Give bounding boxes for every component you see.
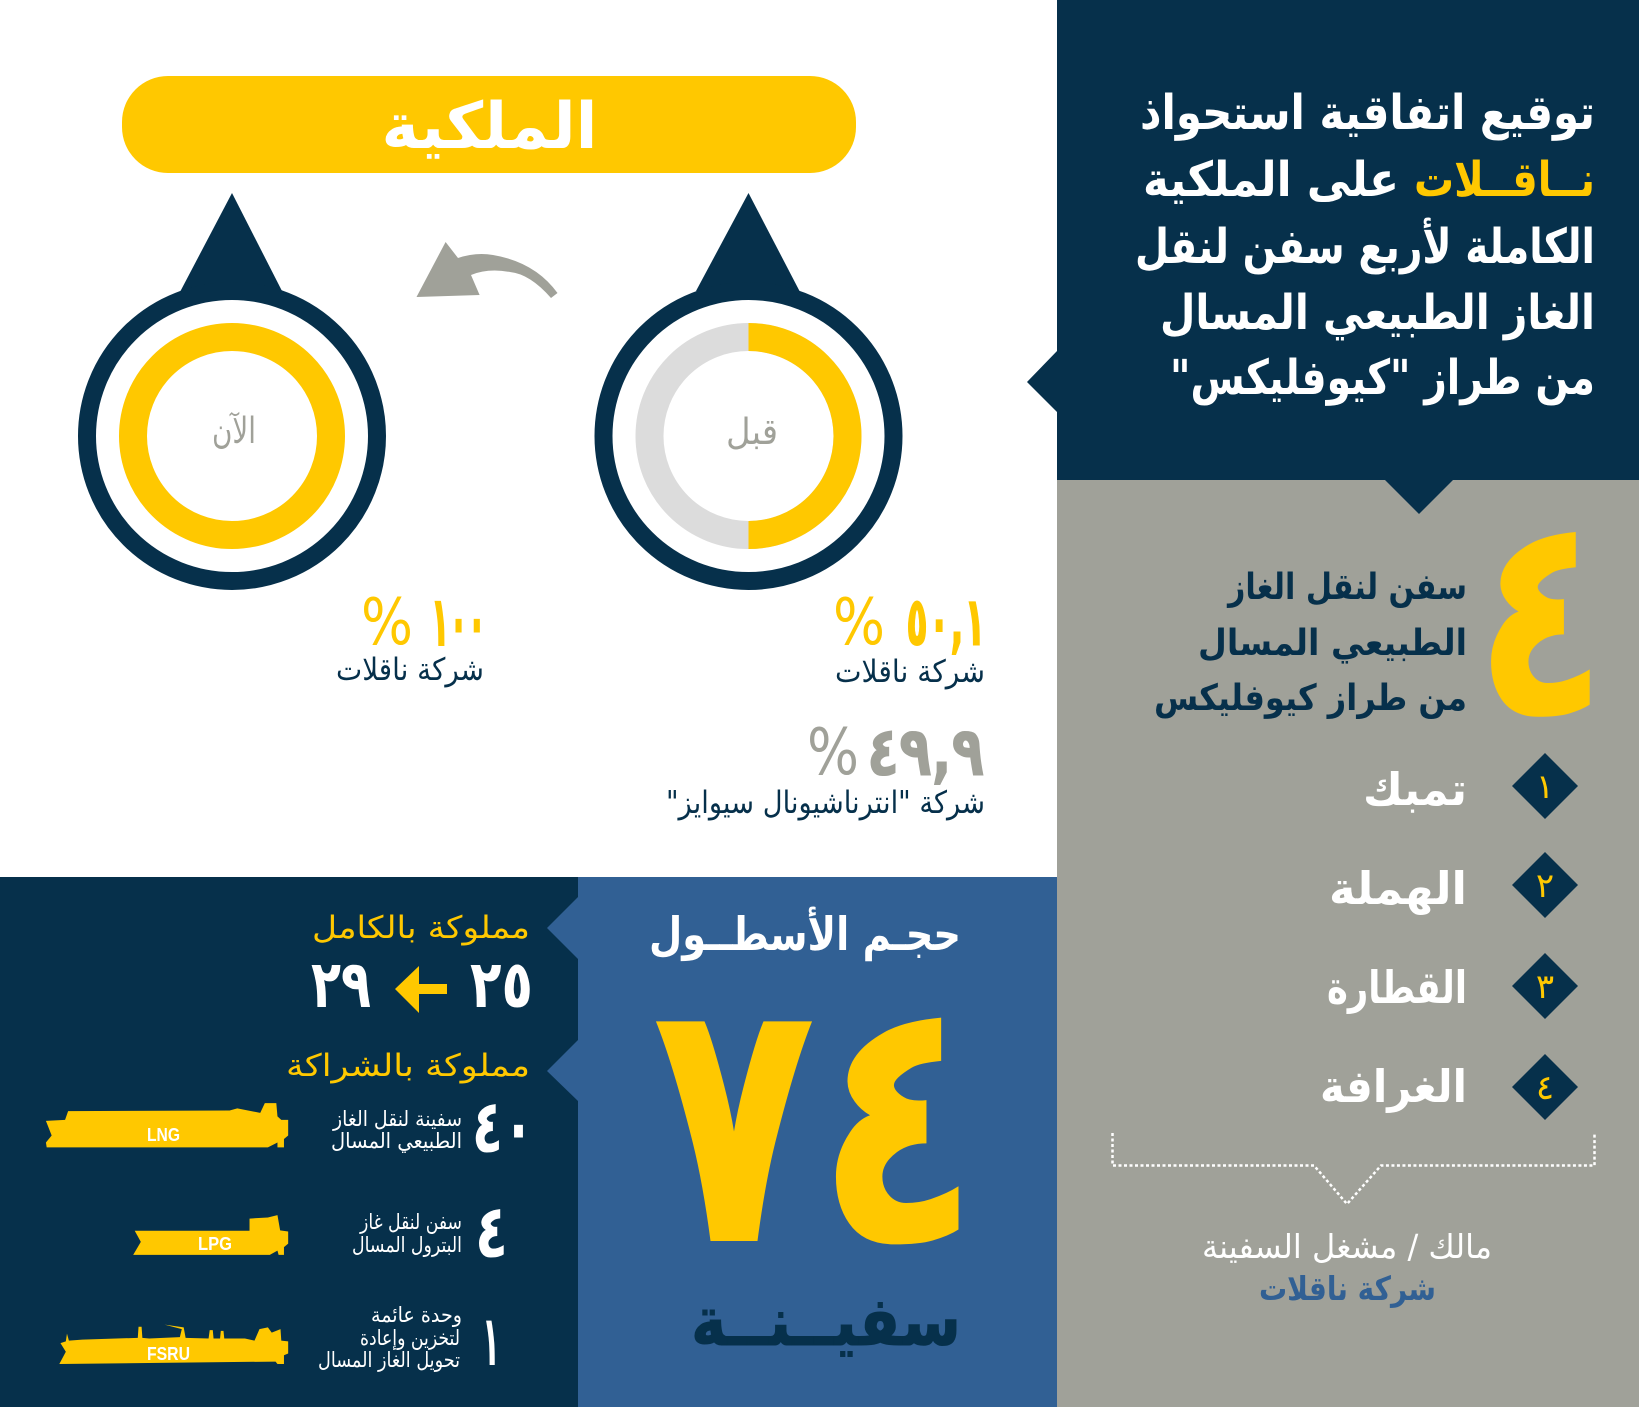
stat: Nakilat now: شركة ناقلات	[336, 652, 484, 688]
panel: ownership title	[122, 76, 856, 173]
ships description: الطبيعي المسال	[1198, 623, 1467, 664]
row: FSRU	[59, 1300, 500, 1382]
row: FSRU: تحويل الغاز المسال	[318, 1348, 460, 1372]
panel: headline	[1027, 0, 1639, 514]
icon: LNG ship: LNG	[147, 1125, 180, 1145]
row: LNG: ٤٠	[472, 1084, 534, 1170]
arrow	[395, 966, 447, 1013]
chart: before ring: قبل	[726, 412, 778, 453]
stat: Nakilat now	[336, 583, 486, 688]
ship 4: Al Gharrafa	[1320, 1054, 1578, 1120]
number 25: ٢٥	[470, 946, 533, 1023]
row: LPG: ٤	[475, 1189, 508, 1275]
stat: Nakilat before: %	[833, 586, 885, 660]
large number 74: ٧٤	[652, 920, 980, 1323]
icon: LPG ship	[133, 1215, 288, 1255]
ship 1: Tembek: ١	[1536, 767, 1554, 807]
stat: International Seaways: ٤٩,٩	[867, 713, 984, 792]
icon: LPG ship: LPG	[198, 1234, 232, 1254]
chart: before ring	[604, 193, 894, 581]
arrow: before to now	[416, 242, 558, 298]
row: LPG	[133, 1189, 508, 1275]
stat: Nakilat before: شركة ناقلات	[835, 654, 985, 690]
owner caption	[1202, 1227, 1492, 1309]
ships description	[1154, 567, 1467, 719]
owner caption: مالك / مشغل السفينة	[1202, 1227, 1492, 1266]
ship 2: Al Hamla: ٢	[1536, 866, 1554, 906]
stat: International Seaways: %	[807, 716, 859, 790]
ships description: من طراز كيوفليكس	[1154, 678, 1467, 719]
label: ships: سفيــنــة	[691, 1283, 961, 1362]
ships description: سفن لنقل الغاز	[1226, 567, 1467, 608]
panel: fleet breakdown	[0, 877, 578, 1407]
stat: Nakilat before	[833, 583, 986, 690]
panel: ownership title: الملكية	[382, 90, 598, 164]
owner caption: شركة ناقلات	[1259, 1269, 1436, 1309]
heading: jointly owned: مملوكة بالشراكة	[286, 1048, 530, 1084]
ship 3: Al Qattara	[1327, 953, 1578, 1019]
text: ١٠٠	[431, 583, 486, 662]
row: LPG: البترول المسال	[352, 1233, 462, 1257]
ship 1: Tembek: تمبك	[1363, 763, 1467, 816]
ship 3: Al Qattara: القطارة	[1327, 961, 1467, 1014]
row: LNG: سفينة لنقل الغاز	[332, 1107, 462, 1131]
row: FSRU: لتخزين وإعادة	[360, 1326, 460, 1351]
row: FSRU: وحدة عائمة	[371, 1303, 462, 1327]
heading: fully owned: مملوكة بالكامل	[312, 910, 530, 946]
headline text: على الملكية	[1143, 152, 1399, 208]
panel: fleet size	[578, 877, 1057, 1407]
chart: now ring	[87, 193, 377, 581]
ship 2: Al Hamla: الهملة	[1329, 862, 1467, 915]
number 29: ٢٩	[311, 946, 371, 1023]
headline text	[1135, 85, 1595, 406]
stat: Nakilat before: ٥٠,١	[906, 583, 986, 662]
ship 1: Tembek	[1363, 753, 1578, 819]
chart: now ring: الآن	[212, 411, 256, 452]
heading: fleet size: حجـم الأسطــول	[649, 906, 961, 961]
ship 4: Al Gharrafa: الغرافة	[1320, 1060, 1467, 1113]
row: LNG	[46, 1084, 534, 1170]
ship 4: Al Gharrafa: ٤	[1536, 1068, 1554, 1108]
ship 2: Al Hamla	[1329, 852, 1578, 918]
icon: FSRU ship	[59, 1325, 288, 1364]
ship 3: Al Qattara: ٣	[1536, 967, 1554, 1007]
row: LPG: سفن لنقل غاز	[359, 1210, 462, 1234]
stat: International Seaways: شركة "انترناشيونال سيوايز"	[666, 785, 985, 821]
headline text: نــاقــلات	[1414, 152, 1595, 208]
stat: Nakilat now: %	[361, 586, 413, 660]
dotted bracket	[1112, 1133, 1594, 1204]
stat: International Seaways	[666, 713, 985, 821]
panel: ships list	[1057, 452, 1639, 1407]
icon: FSRU ship: FSRU	[147, 1344, 190, 1364]
row: LNG: الطبيعي المسال	[331, 1129, 462, 1153]
icon: LNG ship	[46, 1103, 288, 1147]
panel: fleet breakdown: ١	[482, 1300, 500, 1382]
